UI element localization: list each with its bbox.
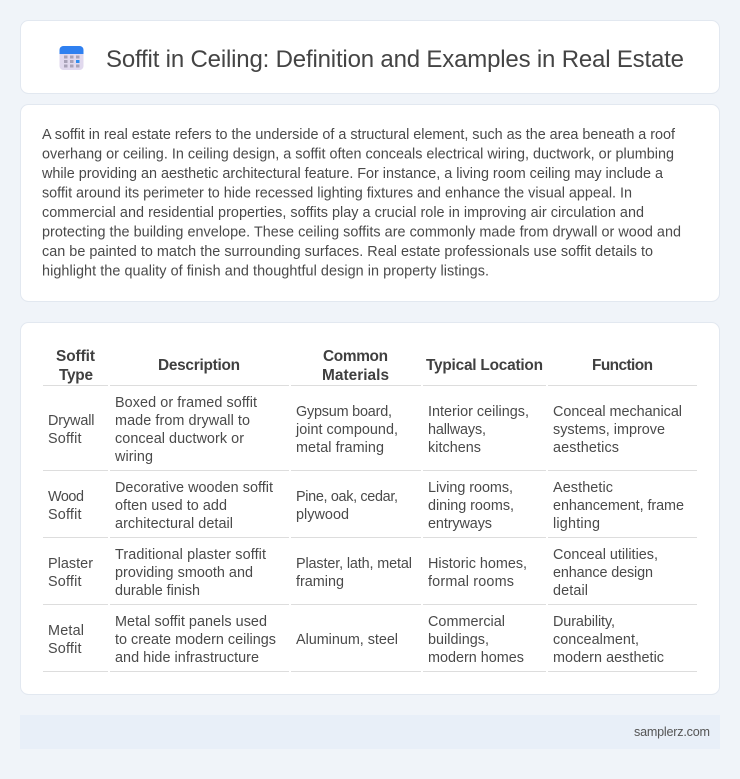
table row: plaster soffit: formal rooms: [428, 574, 514, 590]
table row: plaster soffit: [43, 547, 697, 604]
table row: plaster soffit: providing smooth and: [115, 565, 253, 581]
text block: definition: commercial and residential properties, soffits play a crucial role in improving air circulation and: [42, 205, 644, 221]
table row: drywall soffit: [43, 395, 697, 470]
table row: wood soffit: Living rooms,: [428, 480, 513, 496]
table header row: Function: [592, 357, 653, 374]
table header row: Type: [59, 367, 93, 384]
title: Soffit in Ceiling: Definition and Examples in Real Estate: [106, 46, 684, 73]
table header row: Common: [323, 348, 388, 365]
text block: definition: can be painted to match the surrounding surfaces. Real estate professionals use soffit details to: [42, 244, 653, 260]
table row: plaster soffit: durable finish: [115, 583, 200, 599]
table row: wood soffit: Aesthetic: [553, 480, 613, 496]
table row: metal soffit: modern aesthetic: [553, 650, 664, 666]
table header row: [43, 348, 697, 386]
table row: drywall soffit: kitchens: [428, 440, 481, 456]
table row: drywall soffit: joint compound,: [295, 422, 398, 438]
footer bar: [20, 715, 720, 749]
table row: drywall soffit: Conceal mechanical: [553, 404, 682, 420]
table row: drywall soffit: conceal ductwork or: [115, 431, 244, 447]
table row: metal soffit: Metal soffit panels used: [115, 614, 267, 630]
table row: drywall soffit: metal framing: [296, 440, 384, 456]
table row: metal soffit: [43, 614, 697, 672]
table header row: Soffit: [56, 348, 95, 365]
table row: metal soffit: buildings,: [428, 632, 489, 648]
table row: drywall soffit: Boxed or framed soffit: [115, 395, 257, 411]
table row: plaster soffit: detail: [553, 583, 588, 599]
table row: drywall soffit: systems, improve: [553, 422, 665, 438]
table row: plaster soffit: Traditional plaster soffit: [115, 547, 266, 563]
footer source text: samplerz.com: [634, 725, 710, 739]
panel: soffit types table: [20, 322, 720, 694]
table row: drywall soffit: made from drywall to: [115, 413, 250, 429]
table row: drywall soffit: Drywall: [48, 413, 94, 429]
table row: drywall soffit: aesthetics: [553, 440, 619, 456]
table row: drywall soffit: Interior ceilings,: [428, 404, 529, 420]
panel: title card: [20, 20, 720, 94]
table row: wood soffit: dining rooms,: [428, 498, 514, 514]
panel: definition paragraph: [20, 104, 720, 302]
table row: wood soffit: often used to add: [115, 498, 227, 514]
table header row: Description: [158, 357, 240, 374]
table row: plaster soffit: Soffit: [48, 574, 82, 590]
table row: metal soffit: Commercial: [428, 614, 505, 630]
table row: metal soffit: Durability,: [553, 614, 615, 630]
table row: plaster soffit: Plaster, lath, metal: [296, 556, 412, 572]
table row: wood soffit: lighting: [553, 516, 600, 532]
table row: wood soffit: Wood: [48, 489, 84, 505]
table row: plaster soffit: enhance design: [553, 565, 653, 581]
table row: plaster soffit: Historic homes,: [428, 556, 527, 572]
table header row: Materials: [322, 367, 389, 384]
table row: drywall soffit: hallways,: [428, 422, 486, 438]
table row: wood soffit: Pine, oak, cedar,: [296, 489, 398, 505]
text block: definition: overhang or ceiling. In ceiling design, a soffit often conceals electrical wiring, ductwork, or plumbing: [42, 146, 674, 162]
table row: metal soffit: concealment,: [553, 632, 639, 648]
table row: plaster soffit: Conceal utilities,: [553, 547, 658, 563]
table row: plaster soffit: Plaster: [48, 556, 93, 572]
table row: metal soffit: Aluminum, steel: [296, 632, 398, 648]
table row: drywall soffit: Soffit: [48, 431, 82, 447]
table row: wood soffit: architectural detail: [115, 516, 233, 532]
text block: definition: protecting the building envelope. These ceiling soffits are commonly made from drywall or wood and: [42, 224, 681, 240]
table row: drywall soffit: wiring: [114, 449, 153, 465]
text block: definition: highlight the quality of finish and thoughtful design in property listings.: [42, 264, 489, 280]
table row: wood soffit: entryways: [428, 516, 492, 532]
table header row: Typical Location: [426, 357, 543, 374]
table row: metal soffit: and hide infrastructure: [115, 650, 259, 666]
text block: definition: while providing an aesthetic architectural feature. For instance, a living room ceiling may include a: [41, 166, 663, 182]
table row: wood soffit: Decorative wooden soffit: [115, 480, 273, 496]
table row: drywall soffit: Gypsum board,: [296, 404, 392, 420]
table row: metal soffit: Soffit: [48, 641, 82, 657]
table row: plaster soffit: framing: [296, 574, 344, 590]
table row: metal soffit: Metal: [48, 623, 84, 639]
text block: definition: A soffit in real estate refers to the underside of a structural element, such as the area beneath a roof: [42, 127, 676, 143]
table row: wood soffit: Soffit: [48, 507, 82, 523]
table row: wood soffit: [43, 480, 697, 538]
text block: definition: soffit around its perimeter to hide recessed lighting fixtures and enhance the visual appeal. In: [42, 186, 632, 202]
table row: metal soffit: to create modern ceilings: [115, 632, 276, 648]
text block: definition: [41, 127, 681, 280]
table row: wood soffit: enhancement, frame: [553, 498, 684, 514]
icon: calendar: [60, 46, 84, 70]
table row: wood soffit: plywood: [296, 507, 349, 523]
table row: metal soffit: modern homes: [428, 650, 524, 666]
